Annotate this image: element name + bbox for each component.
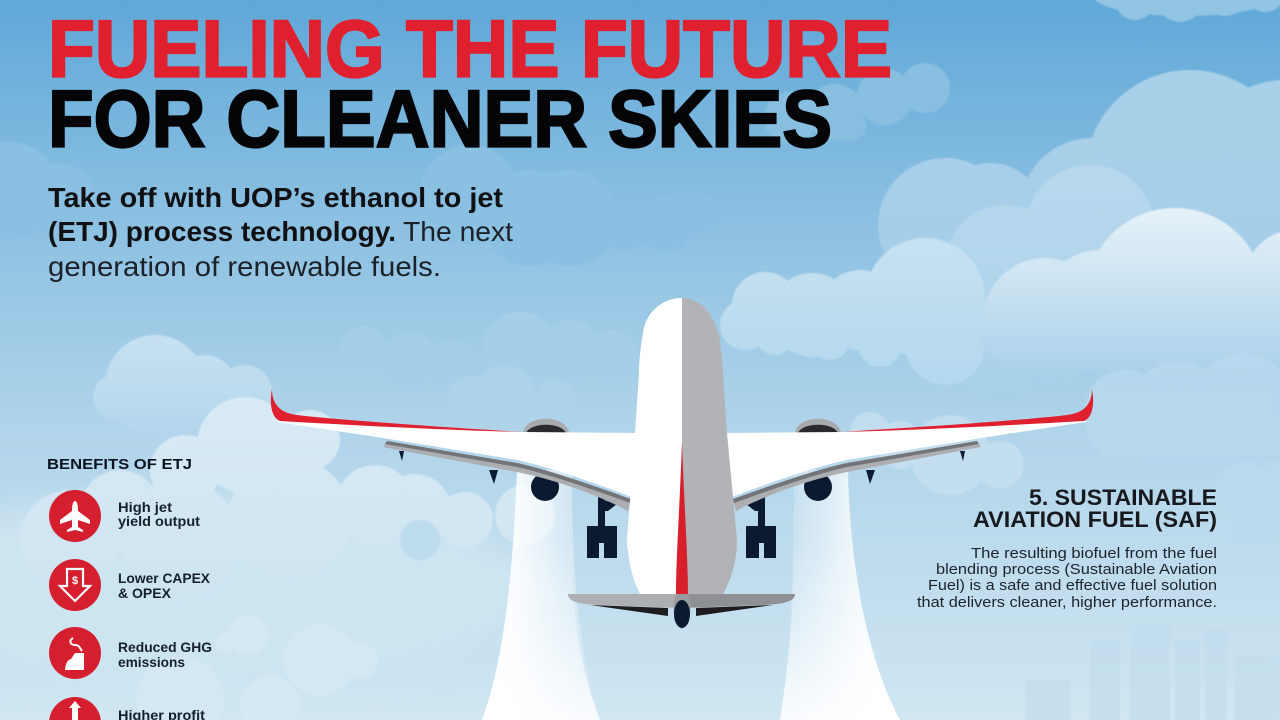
- SAF heading: AVIATION FUEL (SAF): [973, 507, 1217, 532]
- icon: up arrow: [69, 701, 81, 720]
- contrails: [482, 470, 900, 720]
- subtitle: Take off with UOP’s ethanol to jet: [48, 182, 503, 213]
- right wing: [724, 418, 1086, 497]
- icon: factory smoke: [65, 653, 84, 670]
- right engine top: [795, 419, 841, 433]
- title line 2: FOR CLEANER SKIES: [48, 74, 832, 164]
- icon: down arrow with dollar: [60, 569, 90, 601]
- benefits heading: BENEFITS OF ETJ: [47, 457, 192, 473]
- benefit: higher profit: [49, 697, 205, 720]
- SAF description: The resulting biofuel from the fuel: [971, 545, 1217, 562]
- subtitle: generation of renewable fuels.: [48, 251, 441, 282]
- underwing parts: [399, 451, 965, 558]
- fuselage left half: [627, 298, 682, 594]
- SAF description: blending process (Sustainable Aviation: [936, 561, 1217, 578]
- left winglet: [271, 389, 523, 432]
- tail cone: [674, 594, 690, 629]
- left landing gear: [587, 497, 617, 558]
- left flap: [383, 441, 631, 511]
- subtitle: The next: [403, 216, 513, 247]
- city skyline haze: [1025, 625, 1280, 720]
- clouds: right: [720, 70, 1280, 547]
- icon: plane: [60, 501, 90, 532]
- title: [48, 4, 892, 164]
- SAF description: Fuel) is a safe and effective fuel solution: [928, 577, 1217, 594]
- left engine top: [523, 419, 569, 433]
- right winglet: [841, 389, 1093, 432]
- benefit: reduced GHG: Reduced GHG: [118, 639, 212, 655]
- subtitle: (ETJ) process technology.: [48, 216, 396, 247]
- benefit: high jet yield: yield output: [118, 513, 200, 529]
- clouds: upper background: [0, 0, 1280, 266]
- benefit: lower capex: $: [72, 575, 78, 587]
- benefit: lower capex: & OPEX: [118, 585, 172, 601]
- benefit: reduced GHG: emissions: [118, 654, 185, 670]
- benefit: reduced GHG: [49, 627, 212, 679]
- SAF heading: 5. SUSTAINABLE: [1029, 485, 1217, 510]
- benefit: high jet yield: High jet: [118, 499, 172, 515]
- subtitle: [48, 182, 513, 282]
- benefit: lower capex: Lower CAPEX: [118, 570, 211, 586]
- left wing: [278, 418, 640, 497]
- panel: benefits of ETJ: [47, 457, 212, 720]
- benefit: lower capex: [49, 559, 211, 611]
- benefit: high jet yield: [49, 490, 200, 542]
- red tail fin: [676, 442, 688, 594]
- airplane: [271, 298, 1093, 629]
- haze: lower-left cloud bank: [0, 495, 540, 685]
- clouds: centre and left: [93, 312, 637, 442]
- tailplane: [568, 594, 682, 608]
- panel: sustainable aviation fuel: [917, 485, 1217, 611]
- right flap: [733, 441, 981, 511]
- SAF description: that delivers cleaner, higher performance.: [917, 594, 1217, 611]
- fuselage right half: [682, 298, 737, 594]
- title line 1: FUELING THE FUTURE: [48, 4, 892, 94]
- right landing gear: [746, 497, 776, 558]
